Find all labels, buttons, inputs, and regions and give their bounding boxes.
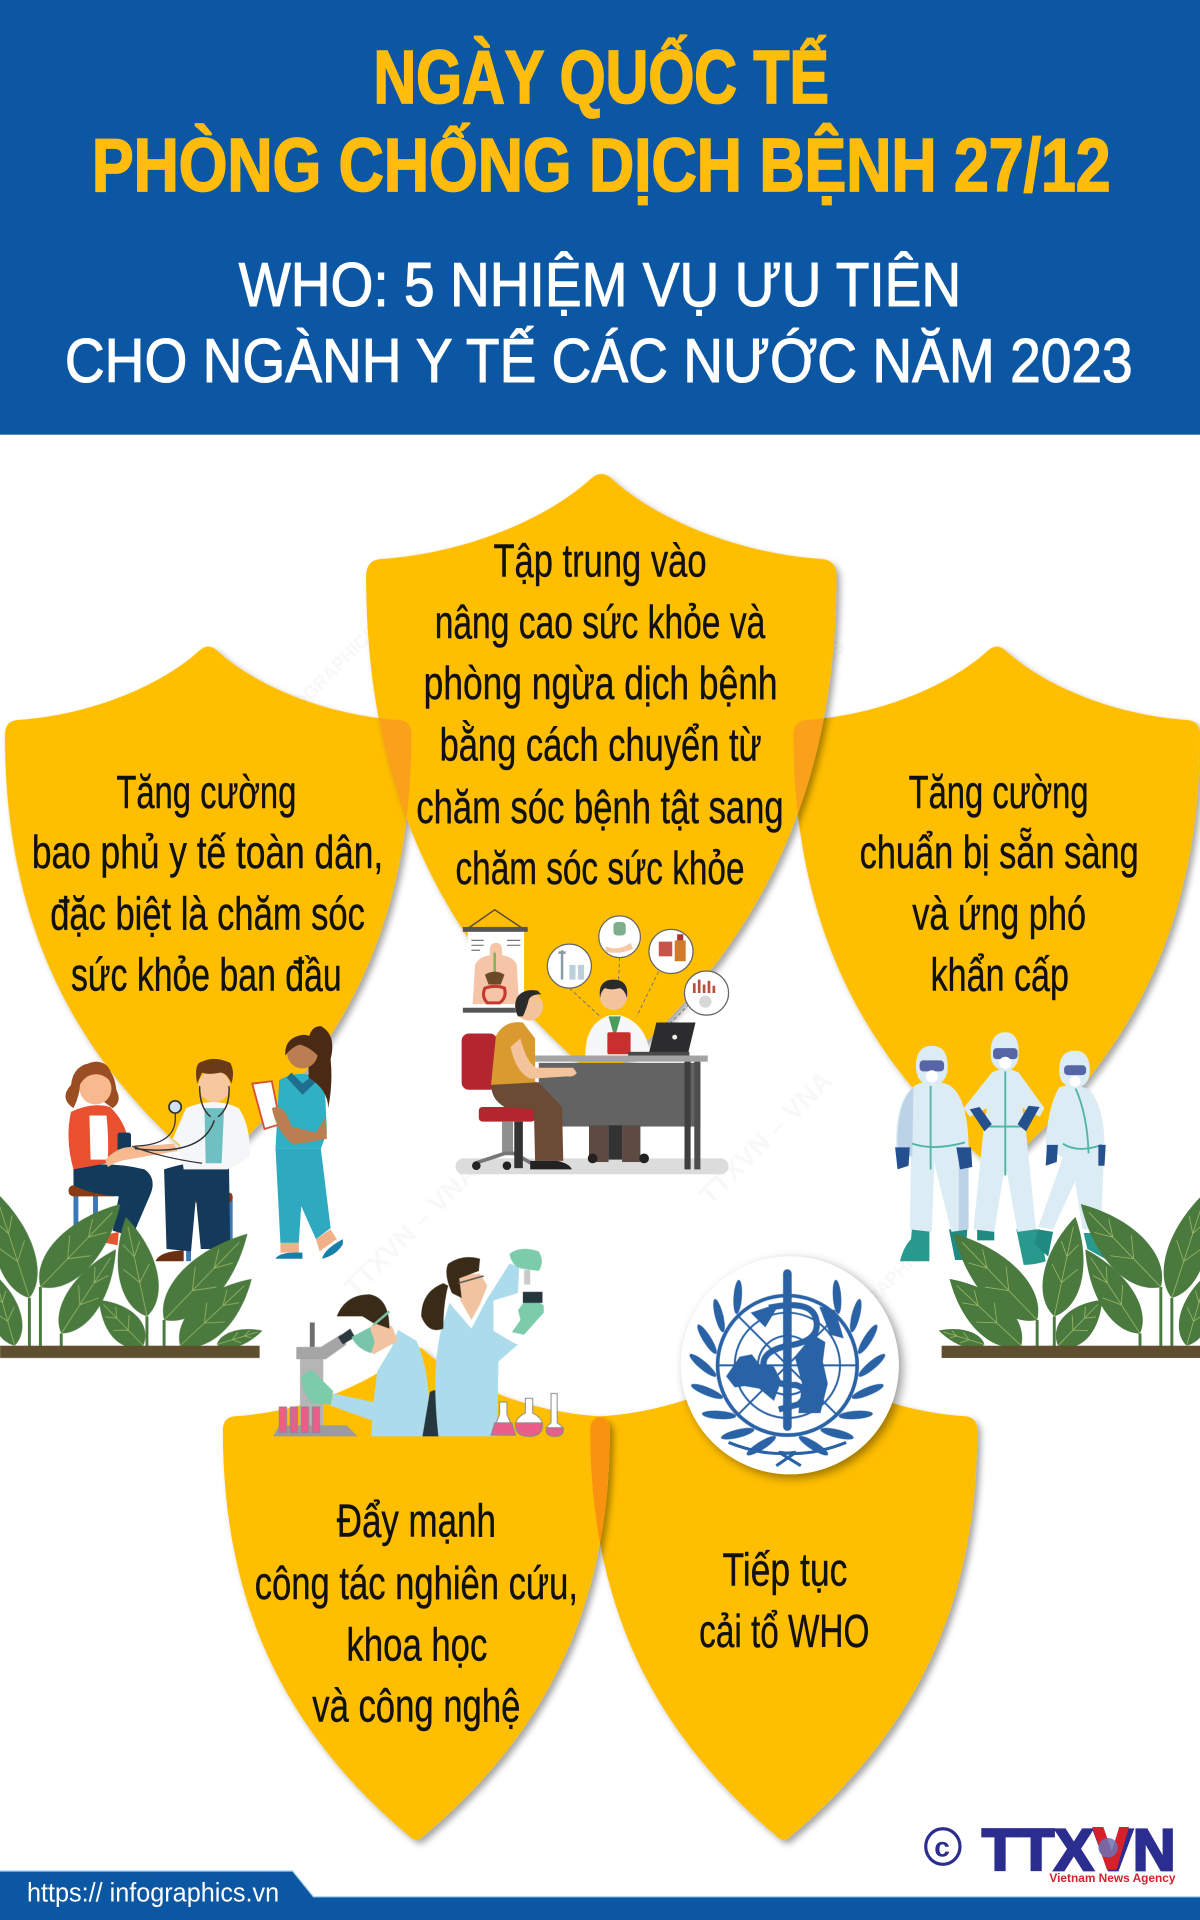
text: left shield: bao phủ y tế toàn dân, [32,826,383,878]
copyright and TTXVN logo [926,1818,1176,1885]
overlap: bottom shields [590,1416,610,1542]
overlap: right and centre shields [794,718,824,814]
text: right shield: Tăng cường [909,766,1089,818]
watermarks: TTXVN – VNA [693,1065,838,1210]
watermarks: TTXVN – VNA [338,1157,483,1302]
plant: left [0,1185,265,1360]
text: bottom left shield: công tác nghiên cứu, [255,1557,578,1609]
copyright symbol: c [934,1831,950,1862]
text: left shield: Tăng cường [116,766,296,818]
red swoosh and globe [1092,1827,1129,1870]
watermarks: INFOGRAPHICS [821,1235,935,1350]
male scientist [301,1294,430,1436]
shield: bottom left [223,1347,610,1840]
text: centre shield: bằng cách chuyển từ [440,718,762,770]
anatomy poster [463,910,528,1013]
text: bottom left shield [255,1495,578,1732]
text: bottom left shield: và công nghệ [312,1680,520,1732]
title: NGÀY QUỐC TẾ [373,35,829,119]
continents [726,1303,844,1413]
subtitle: WHO: 5 NHIỆM VỤ ƯU TIÊN [239,250,961,320]
WHO emblem [681,1256,899,1474]
flasks [491,1393,563,1436]
stool: doctor [184,1193,233,1261]
info circles [547,916,729,1015]
shield: left [5,647,411,1169]
shield: right [793,647,1200,1169]
header band [0,0,1200,435]
doctor at desk [585,980,650,1163]
ground bar [0,1346,260,1358]
watermarks [267,621,935,1350]
microscope [273,1322,358,1436]
text: left shield [32,766,383,1001]
worker 2 [964,1032,1046,1265]
illustration: laboratory scientists [273,1249,563,1436]
desk [535,1056,708,1169]
footer url: https:// infographics.vn [27,1878,279,1908]
subtitle [65,250,1133,396]
female scientist [421,1249,544,1436]
worker 3 [1035,1051,1113,1261]
ground bar [942,1346,1200,1358]
text: centre shield: phòng ngừa dịch bệnh [424,657,778,709]
text: right shield: khẩn cấp [931,949,1069,1001]
watermarks: INFOGRAPHICS [735,635,849,750]
overlap: left and centre shields [378,718,412,818]
illustration: clinic consultation [456,910,729,1174]
text: centre shield: Tập trung vào [493,535,707,587]
text: bottom right shield: Tiếp tục [722,1544,847,1596]
text: centre shield [416,535,784,894]
dashed connectors [569,958,689,1026]
agency tagline: Vietnam News Agency [1049,1872,1176,1885]
chair back [422,1390,447,1436]
text: right shield [860,766,1139,1001]
patient [491,990,577,1169]
text: right shield: và ứng phó [912,887,1086,939]
title [92,35,1111,207]
worker 1 [895,1046,972,1261]
text: centre shield: chăm sóc bệnh tật sang [416,781,784,833]
floor [456,1158,729,1174]
text: left shield: đặc biệt là chăm sóc [50,887,365,939]
text: centre shield: nâng cao sức khỏe và [435,596,765,648]
stool: patient [69,1185,119,1255]
illustration: medical check-up team [65,1026,343,1261]
text: bottom right shield: cải tổ WHO [699,1605,869,1657]
nurse [252,1026,343,1259]
circle icons [558,922,714,1008]
chair [462,1033,535,1170]
staff and serpent [763,1273,817,1427]
stems [29,1287,164,1347]
doctor [132,1059,250,1261]
laptop [628,1022,696,1056]
laurel wreath [687,1280,888,1466]
plant: right [936,1185,1200,1360]
watermarks: INFOGRAPHICS [267,621,382,735]
leaves [0,1185,265,1360]
text: bottom left shield: Đẩy mạnh [337,1495,496,1547]
stems [1037,1287,1172,1347]
text: left shield: sức khỏe ban đầu [71,949,342,1001]
test tubes [279,1407,320,1433]
text: centre shield: chăm sóc sức khỏe [456,842,744,894]
shield: bottom right [590,1347,977,1840]
leaves [936,1185,1200,1360]
shield: centre [366,474,836,1079]
footer band [0,1871,1200,1920]
copyright symbol [926,1829,960,1864]
text: bottom left shield: khoa học [347,1618,487,1670]
patient [65,1062,178,1245]
agency wordmark: TTXVN [982,1818,1176,1883]
illustration: protective suit team [895,1032,1113,1265]
text: bottom right shield [699,1544,869,1657]
globe grid [718,1296,857,1435]
